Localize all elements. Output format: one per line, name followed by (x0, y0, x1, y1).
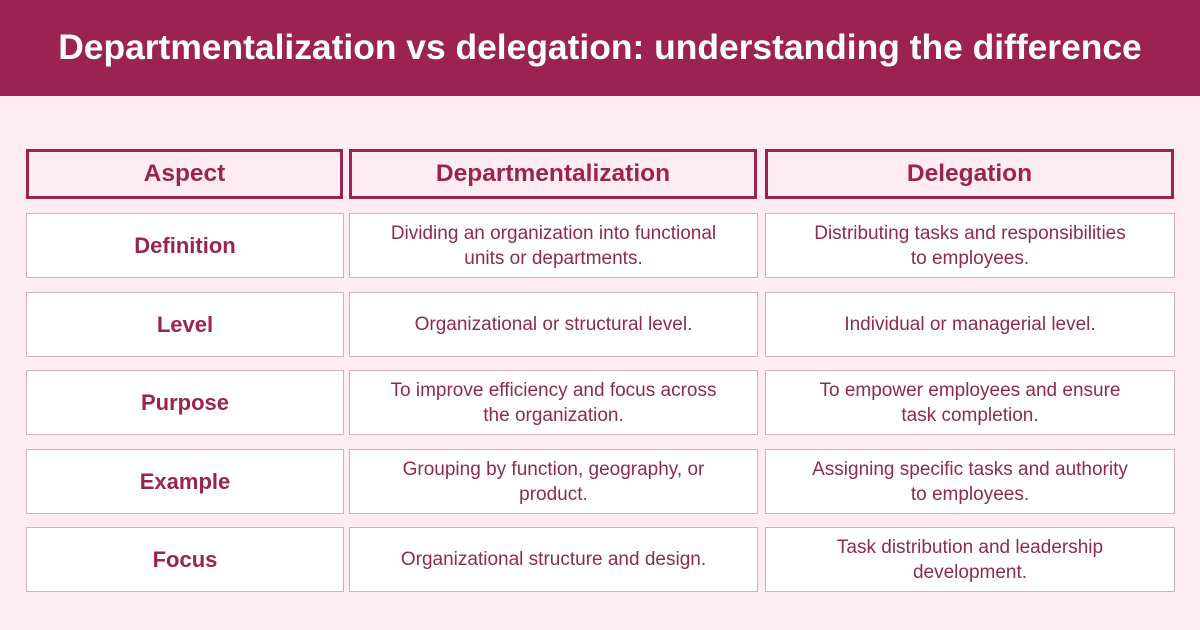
row: definition: Distributing tasks and responsibilities (814, 222, 1126, 244)
row: example: Assigning specific tasks and authority (812, 458, 1128, 480)
row: level: Individual or managerial level. (844, 314, 1096, 335)
row: definition (26, 213, 1175, 278)
row: purpose: task completion. (901, 404, 1039, 426)
header: departmentalization (349, 149, 757, 199)
row: focus (26, 527, 1175, 592)
row: example: to employees. (911, 484, 1029, 504)
header: departmentalization: Departmentalization (436, 160, 670, 187)
row: focus: Focus (153, 547, 217, 572)
row: definition: Dividing an organization into functional (391, 222, 716, 244)
row: example (26, 449, 1175, 514)
row: definition: units or departments. (464, 248, 643, 268)
header: aspect (26, 149, 343, 199)
title (0, 0, 1200, 96)
title: Departmentalization vs delegation: understanding the difference (58, 27, 1142, 67)
row: level: Organizational or structural level. (415, 314, 692, 335)
row: focus: Task distribution and leadership (837, 536, 1103, 558)
header: delegation: Delegation (907, 160, 1032, 187)
row: level: Level (157, 312, 213, 337)
row: example: Example (140, 469, 230, 494)
row: purpose: the organization. (483, 404, 624, 426)
row: example: product. (519, 484, 588, 504)
header: delegation (765, 149, 1174, 199)
row: purpose: Purpose (141, 390, 229, 415)
row: focus: development. (913, 562, 1027, 582)
row: focus: Organizational structure and design. (401, 549, 706, 570)
row: purpose: To empower employees and ensure (819, 380, 1120, 400)
row: purpose (26, 370, 1175, 435)
header: aspect: Aspect (144, 160, 225, 187)
row: definition: to employees. (911, 248, 1029, 268)
row: purpose: To improve efficiency and focus across (391, 380, 716, 400)
row: example: Grouping by function, geography, or (403, 458, 704, 480)
row: level (26, 292, 1175, 357)
row: definition: Definition (134, 233, 236, 258)
